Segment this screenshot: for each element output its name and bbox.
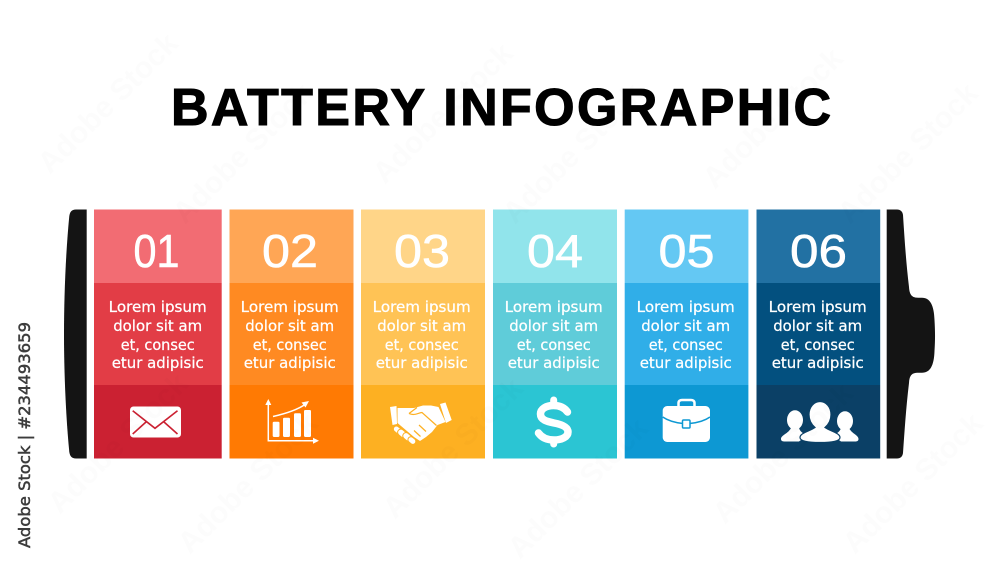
text block 02	[241, 298, 339, 372]
panel: 04	[493, 210, 617, 458]
text block 01: dolor sit am	[113, 317, 202, 335]
text block 03: dolor sit am	[377, 317, 466, 335]
text block 03	[373, 298, 471, 372]
number 06: 06	[790, 225, 847, 277]
text block 06: etur adipisic	[772, 354, 864, 372]
text block 05: dolor sit am	[641, 317, 730, 335]
text block 02: etur adipisic	[244, 354, 336, 372]
number 01: 01	[134, 225, 180, 277]
text block 03: et, consec	[385, 336, 459, 354]
text block 06: dolor sit am	[773, 317, 862, 335]
text block 05	[637, 298, 735, 372]
panel: 01	[94, 210, 222, 458]
panel: 06	[756, 210, 880, 458]
text block 02: Lorem ipsum	[241, 298, 339, 316]
text block 06	[769, 298, 867, 372]
text block 04	[505, 298, 603, 372]
text block 06: et, consec	[781, 336, 855, 354]
number 02: 02	[262, 225, 318, 277]
number 05: 05	[658, 225, 714, 277]
text block 01: et, consec	[121, 336, 195, 354]
panel: 02	[230, 210, 354, 458]
battery left cap	[64, 210, 87, 458]
text block 02: dolor sit am	[245, 317, 334, 335]
icon: handshake	[390, 402, 452, 446]
text block 03: Lorem ipsum	[373, 298, 471, 316]
icon: bar chart	[265, 399, 319, 444]
text block 06: Lorem ipsum	[769, 298, 867, 316]
number 03: 03	[394, 225, 450, 277]
text block 04: et, consec	[517, 336, 591, 354]
stock credit: Adobe Stock | #234493659	[15, 322, 34, 548]
text block 04: etur adipisic	[508, 354, 600, 372]
text block 02: et, consec	[253, 336, 327, 354]
text block 01: etur adipisic	[112, 354, 204, 372]
text block 04: dolor sit am	[509, 317, 598, 335]
text block 03: etur adipisic	[376, 354, 468, 372]
number 04: 04	[527, 225, 583, 277]
icon: briefcase	[663, 400, 710, 442]
text block 05: et, consec	[649, 336, 723, 354]
text block 04: Lorem ipsum	[505, 298, 603, 316]
panel: 03	[361, 210, 485, 458]
battery right cap	[887, 210, 935, 458]
icon: people	[781, 402, 858, 442]
text block 01	[109, 298, 207, 372]
title: BATTERY INFOGRAPHIC	[171, 79, 831, 137]
text block 01: Lorem ipsum	[109, 298, 207, 316]
text block 05: etur adipisic	[640, 354, 732, 372]
text block 05: Lorem ipsum	[637, 298, 735, 316]
icon: dollar sign	[538, 400, 568, 444]
panel: 05	[625, 210, 748, 458]
icon: envelope	[130, 406, 181, 438]
